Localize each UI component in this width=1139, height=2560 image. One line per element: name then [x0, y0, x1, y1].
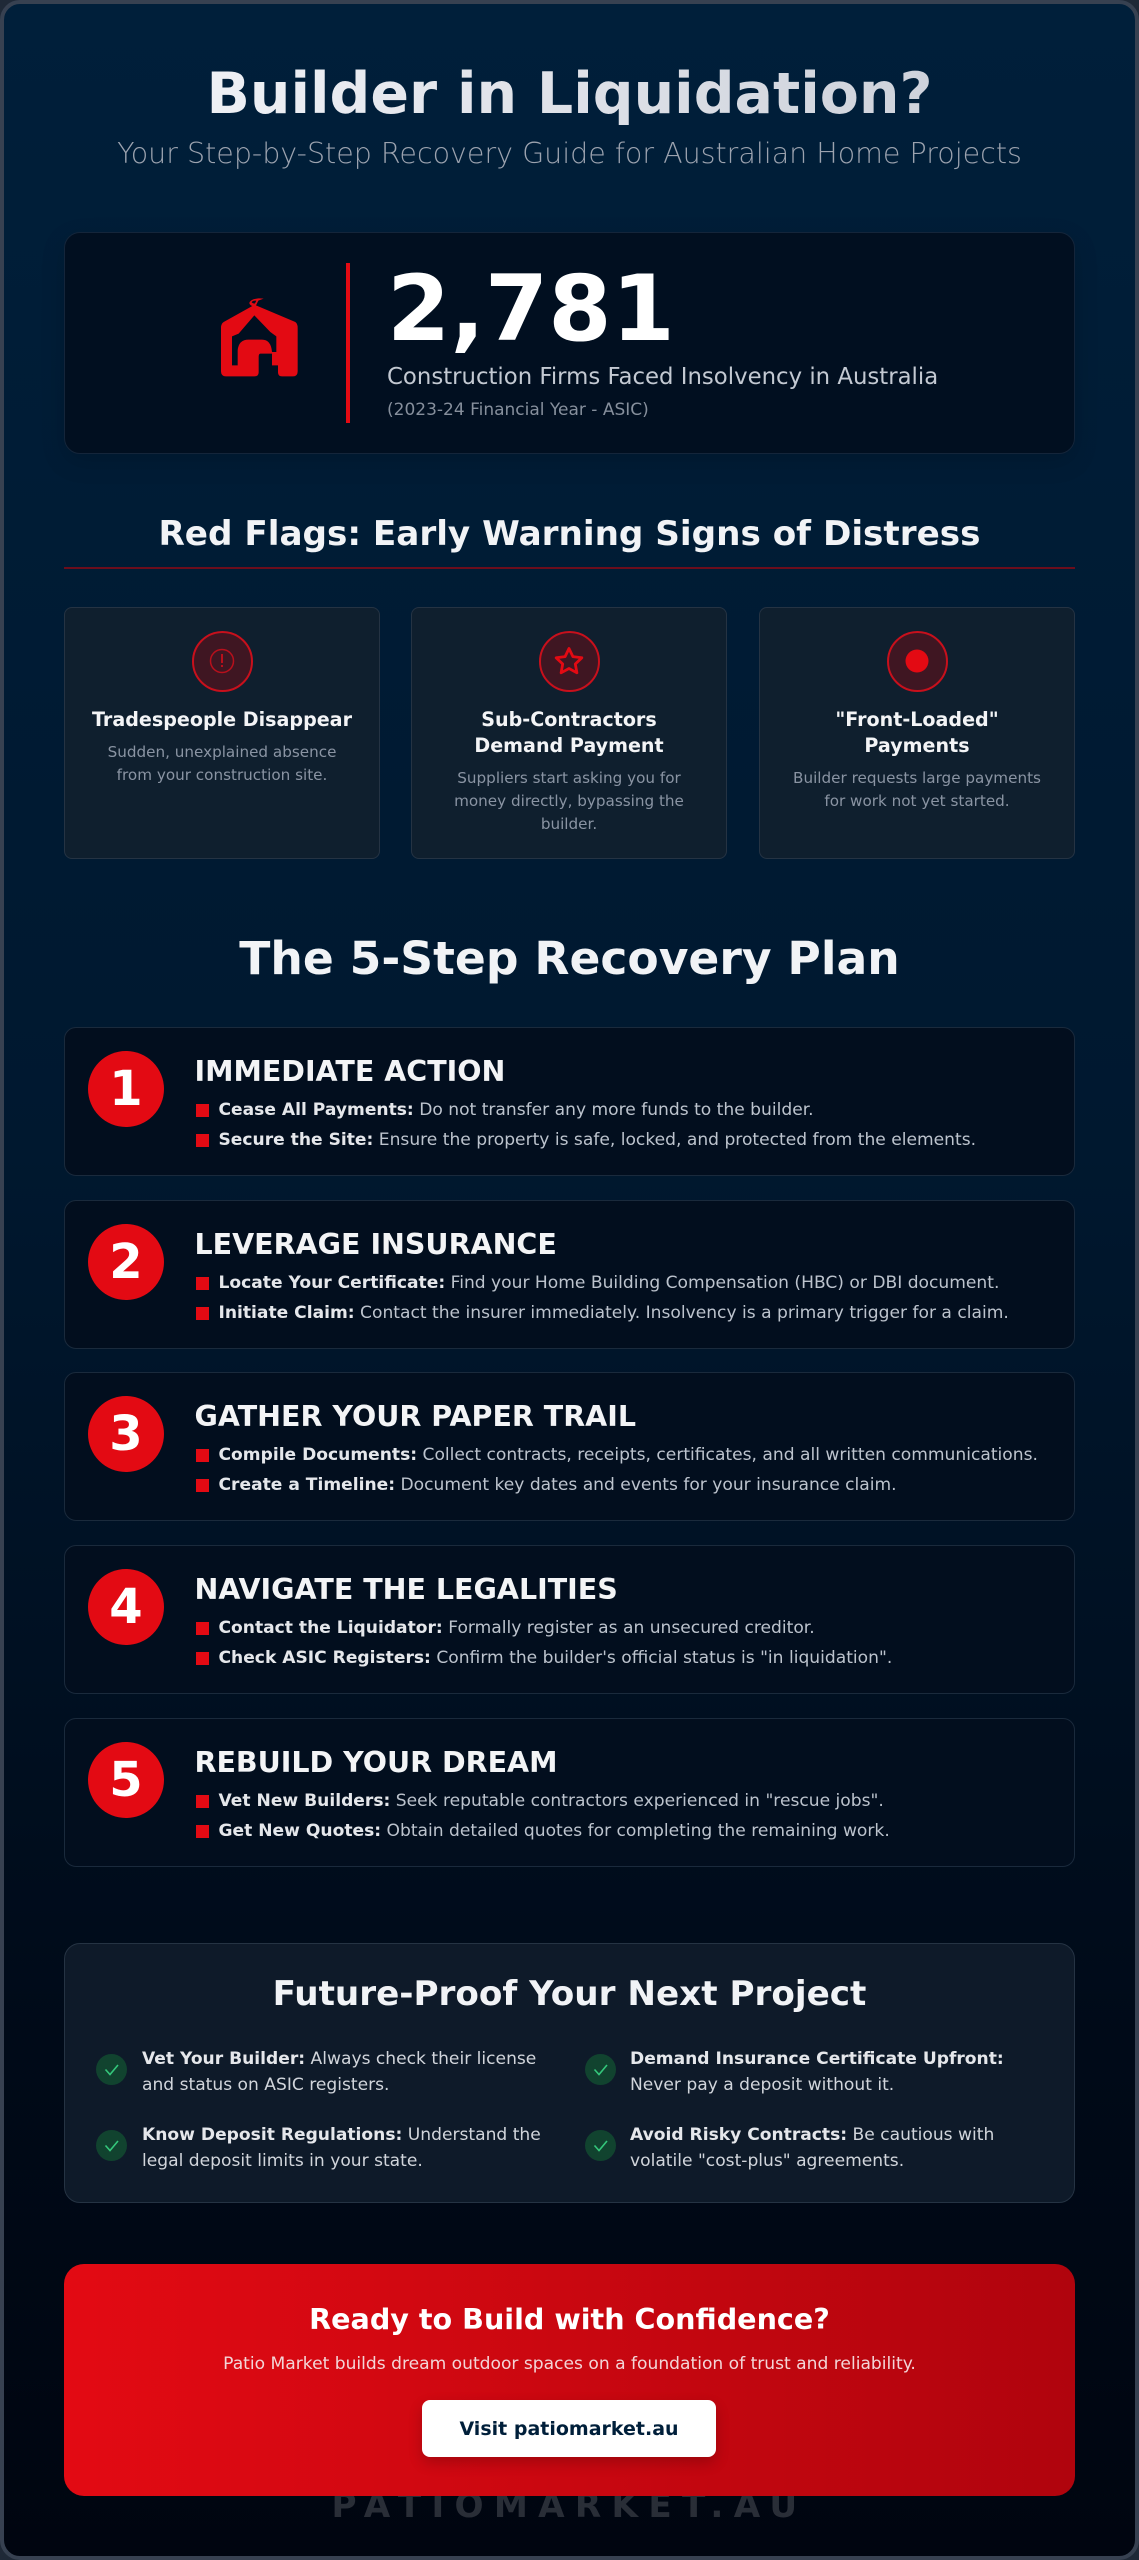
panel: step 5: [64, 1718, 1075, 1867]
flag description: Suppliers start asking you for: [457, 769, 681, 787]
bullet text: Secure the Site: Ensure the property is safe, locked, and protected from the elements.: [218, 1130, 976, 1150]
panel heading: Future-Proof Your Next Project: [273, 1974, 866, 2014]
flag title: Sub-Contractors: [481, 708, 657, 731]
step number: [88, 1396, 164, 1472]
CTA text: Patio Market builds dream outdoor spaces on a foundation of trust and reliability.: [223, 2354, 916, 2374]
section underline: [64, 567, 1075, 569]
bullet marker: [196, 1479, 209, 1492]
statistic label: Construction Firms Faced Insolvency in Australia: [387, 364, 938, 390]
tip 1 text: and status on ASIC registers.: [142, 2075, 390, 2095]
statistic source: (2023-24 Financial Year - ASIC): [387, 400, 649, 420]
flag title: Tradespeople Disappear: [92, 708, 352, 731]
bullet text: Create a Timeline: Document key dates and events for your insurance claim.: [218, 1475, 897, 1495]
flag description: from your construction site.: [117, 766, 327, 784]
title: Builder in Liquidation?: [206, 61, 933, 127]
bullet marker: [196, 1277, 209, 1290]
step number: 1: [109, 1061, 143, 1117]
tip 3 text: legal deposit limits in your state.: [142, 2151, 423, 2171]
step number: [88, 1742, 164, 1818]
flag description: [793, 769, 1041, 810]
bullet marker: [196, 1652, 209, 1665]
subtitle: Your Step-by-Step Recovery Guide for Australian Home Projects: [117, 137, 1022, 170]
tip 2 text: Demand Insurance Certificate Upfront:: [630, 2049, 1004, 2069]
panel: red flag 2: [411, 607, 727, 859]
icon: star: [539, 631, 600, 692]
tip 2 check icon: [585, 2054, 616, 2085]
step number: 5: [109, 1752, 143, 1808]
tip 3 text: Know Deposit Regulations: Understand the: [142, 2125, 541, 2145]
step number: 2: [109, 1234, 143, 1290]
panel: step 1: [64, 1027, 1075, 1176]
panel: future-proof tips: [64, 1943, 1075, 2203]
step title: LEVERAGE INSURANCE: [194, 1228, 557, 1261]
bullet marker: [196, 1104, 209, 1117]
flag description: money directly, bypassing the: [454, 792, 684, 810]
bullet text: Get New Quotes: Obtain detailed quotes for completing the remaining work.: [218, 1821, 890, 1841]
tip 1 text: [142, 2049, 536, 2095]
CTA heading: Ready to Build with Confidence?: [309, 2302, 830, 2336]
flag description: [454, 769, 684, 833]
heading: red flags: Red Flags: Early Warning Signs of Distress: [158, 514, 980, 554]
tip 2 text: Never pay a deposit without it.: [630, 2075, 894, 2095]
tip 2 text: [630, 2049, 1004, 2095]
panel: step 3: [64, 1372, 1075, 1521]
tip 4 text: Avoid Risky Contracts: Be cautious with: [630, 2125, 994, 2145]
CTA button: [422, 2400, 716, 2457]
step title: GATHER YOUR PAPER TRAIL: [194, 1400, 636, 1433]
flag title: [835, 708, 999, 757]
tip 3 text: [142, 2125, 541, 2171]
bullet marker: [196, 1449, 209, 1462]
tip 4 check icon: [585, 2130, 616, 2161]
bullet text: Contact the Liquidator: Formally register as an unsecured creditor.: [218, 1618, 815, 1638]
step title: REBUILD YOUR DREAM: [194, 1746, 557, 1779]
divider bar: [346, 263, 350, 423]
tip 1 text: Vet Your Builder: Always check their license: [142, 2049, 536, 2069]
panel: call to action: [64, 2264, 1075, 2496]
flag title: "Front-Loaded": [835, 708, 999, 731]
bullet marker: [196, 1825, 209, 1838]
step number: [88, 1224, 164, 1300]
bullet text: Locate Your Certificate: Find your Home Building Compensation (HBC) or DBI document.: [218, 1273, 999, 1293]
panel: red flag 1: [64, 607, 380, 859]
flag description: [108, 743, 336, 784]
bullet marker: [196, 1134, 209, 1147]
bullet text: Check ASIC Registers: Confirm the builder's official status is "in liquidation".: [218, 1648, 892, 1668]
tip 1 check icon: [96, 2054, 127, 2085]
step number: [88, 1051, 164, 1127]
icon: exclamation: [192, 631, 253, 692]
icon: dot: [887, 631, 948, 692]
flag description: builder.: [541, 815, 597, 833]
flag description: for work not yet started.: [824, 792, 1010, 810]
bullet text: Vet New Builders: Seek reputable contractors experienced in "rescue jobs".: [218, 1791, 884, 1811]
bullet text: Initiate Claim: Contact the insurer immediately. Insolvency is a primary trigger for a claim.: [218, 1303, 1009, 1323]
step title: IMMEDIATE ACTION: [194, 1055, 505, 1088]
bullet marker: [196, 1307, 209, 1320]
step number: 3: [109, 1406, 143, 1462]
big number: 2,781: [387, 257, 675, 362]
CTA button: Visit patiomarket.au: [459, 2418, 679, 2440]
tip 3 check icon: [96, 2130, 127, 2161]
heading: recovery plan: The 5-Step Recovery Plan: [239, 932, 900, 985]
flag title: Demand Payment: [474, 734, 664, 757]
watermark: PATIOMARKET.AU: [332, 2486, 807, 2526]
step number: [88, 1569, 164, 1645]
panel: key statistic: [64, 232, 1075, 454]
bullet marker: [196, 1795, 209, 1808]
tip 4 text: volatile "cost-plus" agreements.: [630, 2151, 904, 2171]
flag title: [474, 708, 664, 757]
bullet marker: [196, 1622, 209, 1635]
bullet text: Compile Documents: Collect contracts, receipts, certificates, and all written communications.: [218, 1445, 1038, 1465]
step number: 4: [109, 1579, 143, 1635]
tip 4 text: [630, 2125, 994, 2171]
flag title: Payments: [864, 734, 970, 757]
icon: red house: [221, 298, 298, 376]
panel: step 2: [64, 1200, 1075, 1349]
panel: step 4: [64, 1545, 1075, 1694]
step title: NAVIGATE THE LEGALITIES: [194, 1573, 618, 1606]
flag description: Builder requests large payments: [793, 769, 1041, 787]
panel: red flag 3: [759, 607, 1075, 859]
flag description: Sudden, unexplained absence: [108, 743, 336, 761]
bullet text: Cease All Payments: Do not transfer any more funds to the builder.: [218, 1100, 814, 1120]
